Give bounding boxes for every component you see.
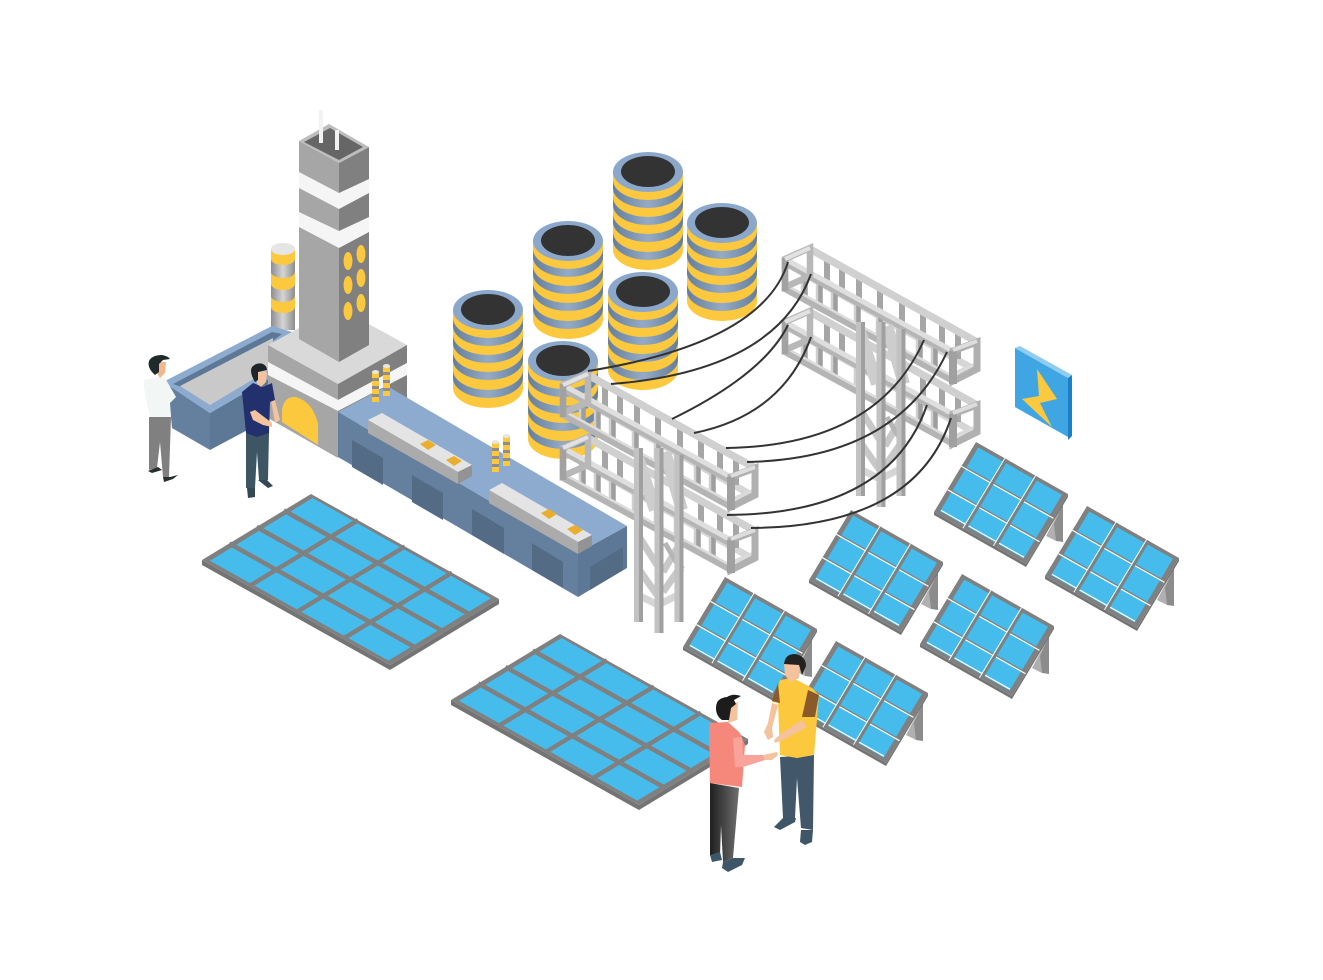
- forearm: [774, 720, 807, 743]
- building windows: [352, 440, 623, 590]
- back transmission pylon: [785, 248, 977, 507]
- person: yellow shirt: [764, 654, 819, 845]
- yellow arched door: [282, 397, 318, 445]
- panel: upper right: [934, 442, 1068, 567]
- person: white shirt: [144, 355, 178, 482]
- main tower: [299, 110, 369, 362]
- panel: lower left: [683, 577, 817, 702]
- panel: centre right: [920, 574, 1054, 699]
- panel: lower centre: [794, 641, 928, 766]
- tilted solar panels: [683, 442, 1179, 766]
- person: navy shirt: [242, 363, 280, 498]
- cylinder: front: [528, 341, 598, 459]
- small insulators: [372, 370, 379, 402]
- left arm: [764, 703, 778, 740]
- flat solar panel right: [451, 634, 748, 810]
- lightning energy sign: [1015, 346, 1072, 440]
- storage cylinders: [453, 152, 757, 459]
- icon: lightning bolt: [1022, 369, 1057, 427]
- cylinder: top: [613, 152, 683, 270]
- roof unit one: [368, 413, 472, 484]
- brown sleeve: [802, 690, 819, 717]
- cylinder: left middle: [533, 221, 603, 339]
- striped rear chimney: [271, 243, 295, 330]
- water tank: [163, 326, 292, 450]
- shirt: [772, 678, 819, 758]
- pink torso: [709, 722, 745, 787]
- legs: [780, 755, 814, 830]
- cylinder: centre: [608, 272, 678, 390]
- arm and hand: [733, 737, 765, 767]
- black trousers: [710, 783, 739, 862]
- cylinder: right: [687, 203, 757, 321]
- head: [728, 702, 738, 723]
- flat solar panel left: [202, 494, 499, 670]
- front transmission pylon: [563, 374, 755, 633]
- panel: centre: [809, 510, 943, 635]
- panel: far right: [1045, 506, 1179, 631]
- power lines: [588, 262, 951, 528]
- person: pink shirt: [709, 695, 778, 872]
- tower windows: [344, 245, 366, 320]
- exhaust pipes: [321, 110, 337, 150]
- tower base block: [268, 307, 407, 458]
- roof unit two: [489, 483, 592, 554]
- cylinder: far left: [453, 290, 523, 408]
- head: [784, 663, 800, 682]
- long blue building: [338, 364, 627, 597]
